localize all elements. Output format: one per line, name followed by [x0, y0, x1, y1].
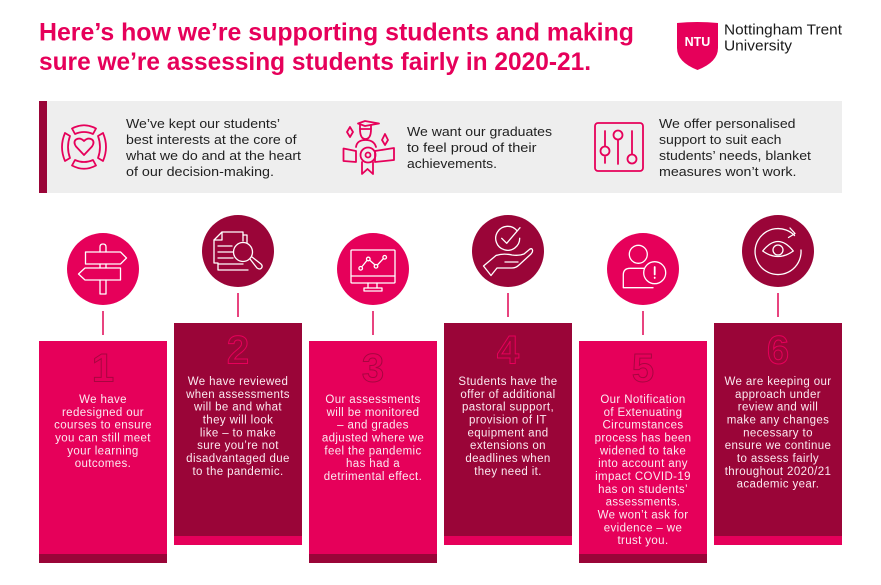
- card 6: throughout 2020/21: [725, 466, 831, 478]
- card 4: offer of additional: [460, 389, 556, 401]
- step 5: [579, 233, 707, 563]
- text: graduates: We want our graduates: [407, 124, 553, 139]
- text: personalised support: We offer personalised: [659, 116, 796, 131]
- card 3: feel the pandemic: [324, 445, 422, 457]
- card 3: Our assessments: [325, 394, 421, 406]
- card 1: courses to ensure: [54, 420, 152, 432]
- card 2: will be and what: [193, 402, 282, 414]
- logo: Nottingham Trent University: [677, 22, 842, 70]
- card 4: pastoral support,: [462, 402, 554, 414]
- card 1: 1: [92, 346, 114, 390]
- card 6: ensure we continue: [725, 440, 831, 452]
- card 6: approach under: [735, 389, 821, 401]
- text: students' best interests: [125, 116, 301, 179]
- card 1: you can still meet: [55, 432, 151, 444]
- card 5: impact COVID-19: [595, 471, 691, 483]
- card 2: We have reviewed: [188, 376, 288, 388]
- text: personalised support: [659, 116, 811, 179]
- card 5: 5: [632, 346, 654, 390]
- card 3: [309, 341, 437, 563]
- icon: eye with review arrow: [742, 215, 814, 287]
- logo: Nottingham Trent University: NTU: [685, 35, 710, 49]
- icon: document magnifier: [202, 215, 274, 287]
- card 2: [174, 323, 302, 545]
- card 1: [39, 341, 167, 563]
- text: graduates: to feel proud of their: [407, 140, 537, 155]
- card 2: like – to make: [200, 427, 276, 439]
- text: graduates: achievements.: [407, 156, 497, 171]
- text: students' best interests: of our decision-making.: [126, 164, 274, 179]
- card 6: [714, 323, 842, 545]
- card 4: equipment and: [467, 427, 549, 439]
- card 3: will be monitored: [326, 407, 419, 419]
- card 5: We won’t ask for: [598, 510, 688, 522]
- card 5: assessments.: [606, 497, 680, 509]
- card 6: 6: [767, 328, 789, 372]
- text: students' best interests: We’ve kept our students’: [126, 116, 280, 131]
- text: graduates: [407, 124, 553, 171]
- card 1: We have: [79, 394, 127, 406]
- card 3: detrimental effect.: [324, 471, 422, 483]
- title: [39, 18, 634, 76]
- card 4: 4: [497, 328, 520, 372]
- card 5: process has been: [595, 432, 691, 444]
- step 2: [174, 215, 302, 545]
- card 3: – and grades: [337, 420, 409, 432]
- card 6: review and will: [738, 402, 818, 414]
- card 5: evidence – we: [604, 522, 682, 534]
- icon: person with alert: [607, 233, 679, 305]
- card 6: make any changes: [727, 414, 829, 426]
- text: personalised support: support to suit each: [659, 132, 782, 147]
- logo: Nottingham Trent University: Nottingham Trent: [724, 22, 842, 38]
- card 5: into account any: [598, 458, 688, 470]
- icon: signpost: [67, 233, 139, 305]
- step 1: [39, 233, 167, 563]
- text: students' best interests: best interests at the core of: [126, 132, 297, 147]
- card 2: disadvantaged due: [186, 453, 290, 465]
- card 5: widened to take: [599, 445, 686, 457]
- card 5: [579, 341, 707, 563]
- text: personalised support: students’ needs, blanket: [659, 148, 811, 163]
- text: students' best interests: what we do and at the heart: [125, 148, 301, 163]
- icon: graduate with diploma: [344, 121, 394, 174]
- card 4: [444, 323, 572, 545]
- card 3: adjusted where we: [322, 432, 424, 444]
- card 4: deadlines when: [465, 453, 551, 465]
- logo: Nottingham Trent University: University: [724, 38, 793, 54]
- card 4: provision of IT: [469, 414, 547, 426]
- card 6: necessary to: [743, 427, 813, 439]
- card 1: your learning: [67, 445, 139, 457]
- icon: heart in ring: [62, 125, 106, 169]
- card 2: to the pandemic.: [192, 466, 284, 478]
- card 5: Circumstances: [602, 420, 684, 432]
- card 6: to assess fairly: [737, 453, 819, 465]
- card 6: academic year.: [737, 479, 819, 491]
- card 4: extensions on: [470, 440, 546, 452]
- card 4: they need it.: [474, 466, 542, 478]
- card 1: outcomes.: [75, 458, 131, 470]
- title: sure we’re assessing students fairly in 2020-21.: [39, 48, 591, 76]
- title: Here’s how we’re supporting students and making: [39, 18, 634, 46]
- icon: monitor chart: [337, 233, 409, 305]
- card 5: trust you.: [617, 535, 669, 547]
- card 2: sure you’re not: [197, 440, 279, 452]
- card 1: redesigned our: [62, 407, 144, 419]
- step 6: [714, 215, 842, 545]
- icon: sliders: [595, 123, 643, 171]
- card 2: when assessments: [185, 389, 290, 401]
- card 2: they will look: [203, 414, 273, 426]
- card 6: We are keeping our: [724, 376, 832, 388]
- card 3: has had a: [346, 458, 400, 470]
- card 5: has on students’: [598, 484, 688, 496]
- step 4: [444, 215, 572, 545]
- card 4: Students have the: [458, 376, 558, 388]
- step 3: [309, 233, 437, 563]
- card 2: 2: [227, 328, 249, 372]
- panel: commitments: [39, 101, 842, 193]
- card 3: 3: [362, 346, 384, 390]
- card 5: Our Notification: [600, 394, 686, 406]
- icon: hand with tick: [472, 215, 544, 287]
- card 5: of Extenuating: [604, 407, 682, 419]
- text: personalised support: measures won’t work.: [659, 164, 796, 179]
